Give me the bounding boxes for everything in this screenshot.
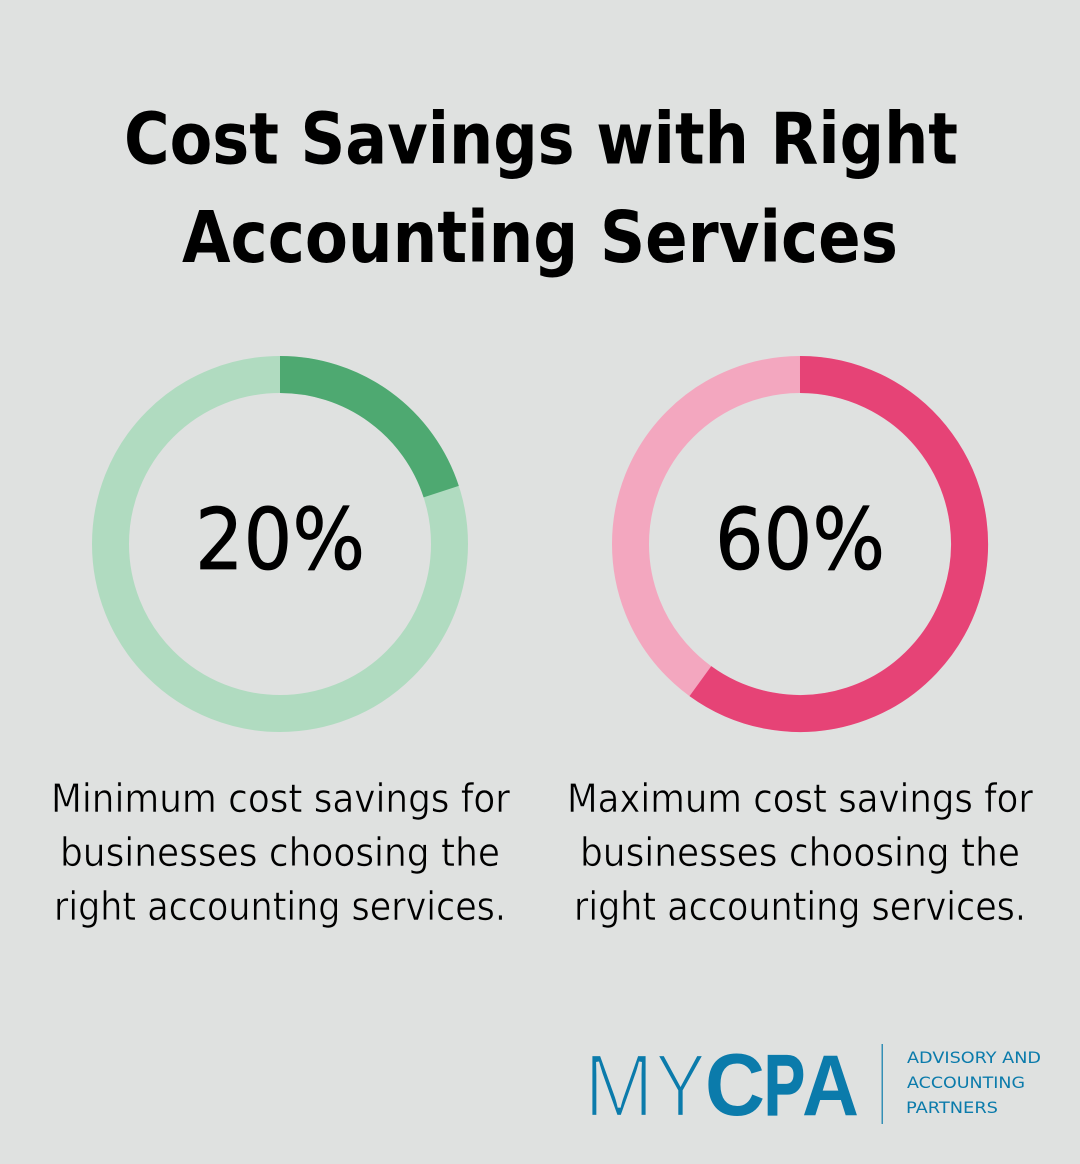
tagline: ADVISORY AND [907,1048,1041,1067]
caption: minimum [51,777,511,930]
divider [882,1044,883,1124]
donut chart: 20% [110,374,450,714]
wordmark: A [802,1038,859,1134]
tagline: ACCOUNTING [907,1073,1025,1092]
caption: minimum: businesses choosing the [60,831,500,876]
title: Accounting Services [182,196,898,279]
caption: minimum: right accounting services. [54,885,506,930]
wordmark: C [705,1035,765,1134]
title [124,98,958,279]
caption: maximum: Maximum cost savings for [567,777,1034,822]
caption: maximum: right accounting services. [574,885,1026,930]
panel: minimum savings [51,374,511,930]
tagline: PARTNERS [906,1098,998,1117]
tagline [906,1048,1041,1117]
wordmark: Y [655,1037,706,1137]
wordmark: M [584,1037,654,1137]
caption: maximum: businesses choosing the [580,831,1020,876]
wordmark: P [764,1038,805,1134]
title: Cost Savings with Right [124,98,958,180]
wordmark [584,1035,859,1137]
donut chart: 60% [630,374,970,714]
caption: minimum: Minimum cost savings for [51,777,511,822]
value: 20%: 20% [195,491,365,590]
logo: MYCPA [584,1035,1041,1137]
value: 60%: 60% [715,491,885,590]
caption: maximum [567,777,1034,930]
panel: maximum savings [567,374,1034,930]
